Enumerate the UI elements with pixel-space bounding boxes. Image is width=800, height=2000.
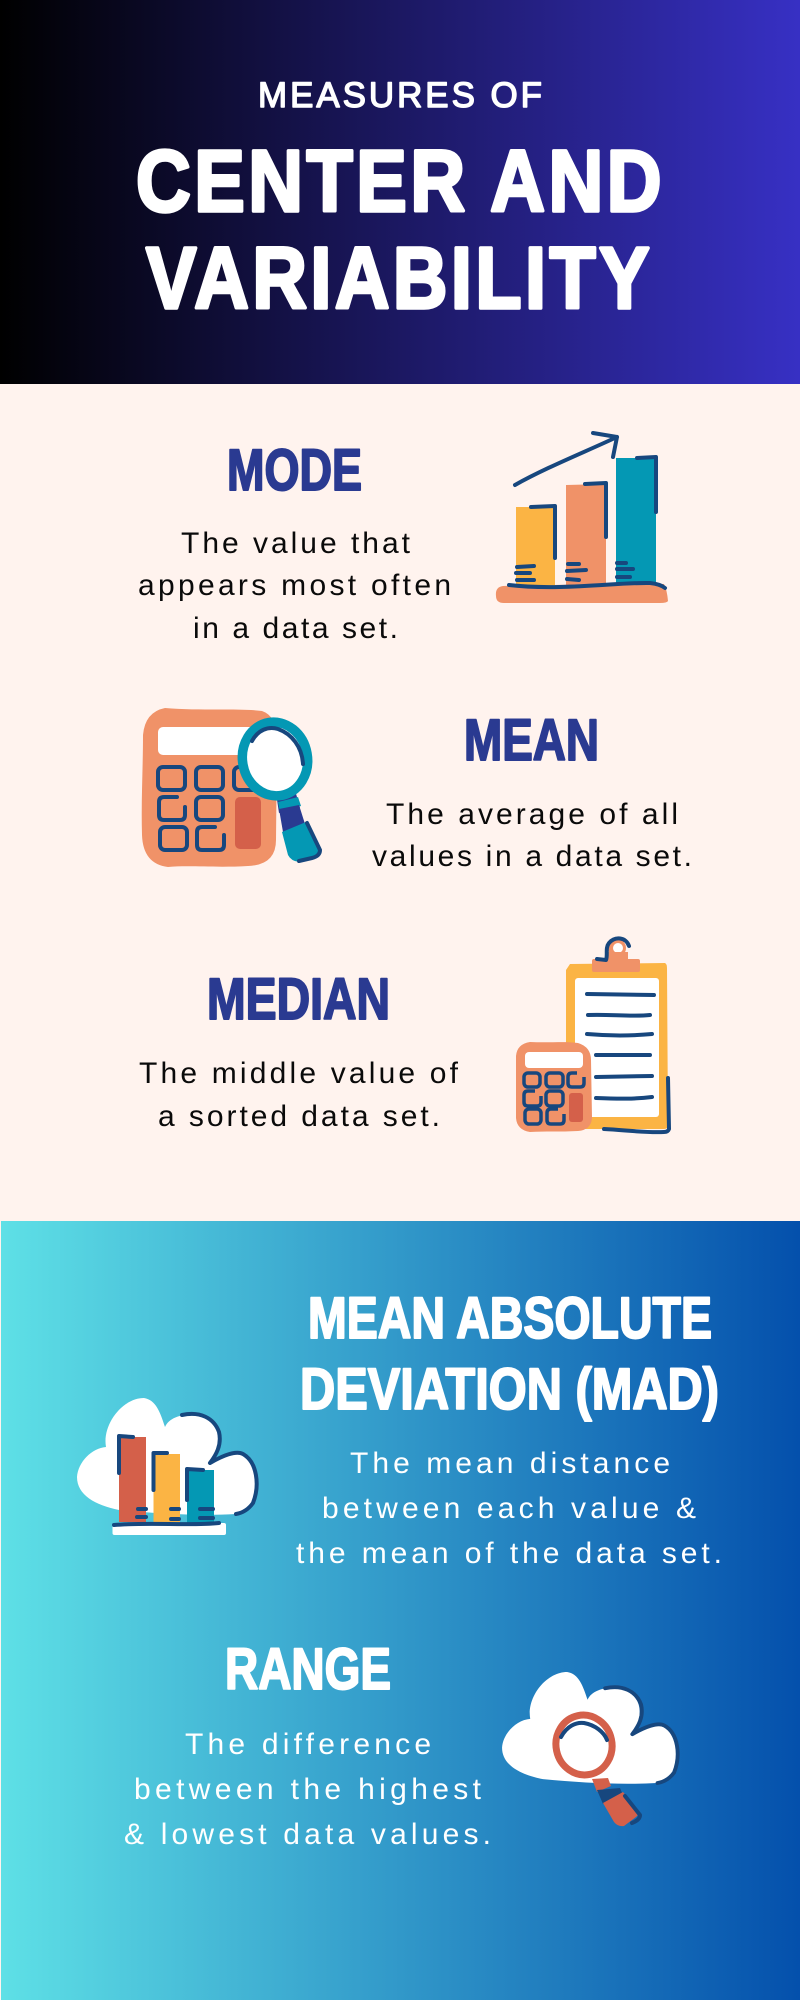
text: mean definition: The average of all [386, 798, 678, 831]
text: median definition [139, 1057, 459, 1133]
text: mode definition [138, 527, 451, 645]
block: mode [138, 438, 451, 645]
heading: range: RANGE [225, 1637, 391, 1702]
panel: measures of variability [1, 1221, 800, 2000]
text: range definition: between the highest [134, 1773, 482, 1806]
text: mode definition: appears most often [138, 569, 451, 602]
text: range definition: The difference [185, 1728, 431, 1761]
title line 1: CENTER AND [136, 133, 665, 230]
text: mean definition: values in a data set. [372, 840, 692, 873]
heading: mode: MODE [227, 438, 362, 503]
block: mean [372, 708, 692, 873]
icon: cloud with magnifier [502, 1672, 678, 1826]
text: MAD definition: between each value & [322, 1492, 696, 1525]
text: median definition: a sorted data set. [158, 1100, 440, 1133]
block: median [139, 967, 459, 1133]
block: range [124, 1637, 491, 1851]
panel: header [0, 0, 800, 384]
text: range definition [124, 1728, 491, 1851]
icon: cloud with bar chart [77, 1398, 257, 1535]
text: MAD definition: the mean of the data set. [296, 1537, 722, 1570]
block: mean absolute deviation [296, 1286, 722, 1570]
title line 2: VARIABILITY [146, 230, 653, 327]
text: mean definition [372, 798, 692, 873]
text: range definition: & lowest data values. [124, 1818, 491, 1851]
icon: calculator with magnifier [142, 708, 320, 867]
heading: mean absolute deviation: MEAN ABSOLUTE [308, 1286, 712, 1351]
text: mode definition: in a data set. [193, 612, 398, 645]
heading: mean absolute deviation: DEVIATION (MAD) [300, 1357, 719, 1422]
heading: mean absolute deviation [300, 1286, 719, 1422]
icon: bar chart with arrow [496, 433, 668, 603]
text: median definition: The middle value of [139, 1057, 459, 1090]
text: MAD definition [296, 1447, 722, 1570]
heading: mean: MEAN [464, 708, 599, 773]
heading: median: MEDIAN [207, 967, 390, 1032]
panel: measures of center [138, 433, 692, 1133]
text: MAD definition: The mean distance [350, 1447, 670, 1480]
text: mode definition: The value that [181, 527, 411, 560]
subtitle: MEASURES OF [258, 76, 545, 115]
icon: clipboard with calculator [516, 938, 669, 1132]
